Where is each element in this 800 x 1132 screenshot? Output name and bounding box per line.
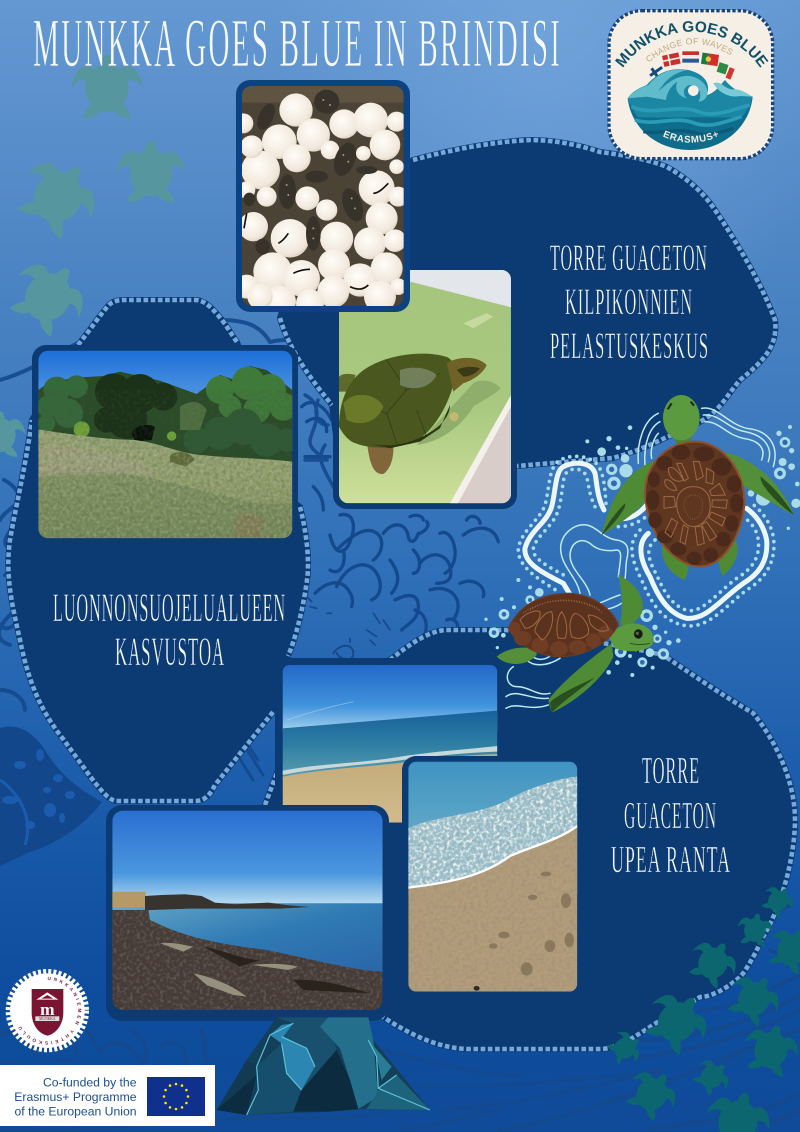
background squiggle pattern: left bbox=[0, 320, 335, 780]
badge title: MUNKKA GOES BLUE bbox=[615, 21, 768, 68]
co-funding text: Co-funded by the bbox=[43, 1076, 137, 1090]
text: beach caption: TORRE bbox=[642, 750, 700, 792]
school name ring: UNKKANIEMEN YHTEISKOULU bbox=[18, 976, 82, 1045]
icon: EU flag bbox=[147, 1077, 205, 1116]
photo: rocky beach with seaweed bbox=[106, 805, 389, 1021]
photo: nature reserve vegetation bbox=[32, 345, 298, 545]
Erasmus+ co-funding box bbox=[0, 1065, 215, 1126]
school monogram: m bbox=[40, 1000, 55, 1019]
school banner text: MUNKKA bbox=[39, 1017, 56, 1021]
co-funding text: Erasmus+ Programme bbox=[14, 1090, 137, 1104]
badge wave bbox=[628, 69, 753, 150]
photo: beach with horizon bbox=[275, 658, 505, 828]
text: beach caption bbox=[611, 750, 731, 881]
co-funding text bbox=[14, 1076, 137, 1118]
panel: bottom right beach panel bbox=[265, 630, 795, 1049]
logo: Munkka Goes Blue badge bbox=[607, 9, 774, 160]
icon: rock cave bbox=[217, 1017, 430, 1115]
dotted aboriginal-style ring behind turtles bbox=[506, 408, 775, 708]
badge subtitle: CHANGE OF WAVES bbox=[646, 38, 733, 62]
panel: top right rescue centre panel bbox=[280, 140, 775, 466]
background squiggle pattern: centre bbox=[302, 403, 498, 660]
text: vegetation caption bbox=[53, 585, 286, 674]
panel: left nature reserve panel bbox=[8, 300, 308, 801]
co-funding text: of the European Union bbox=[15, 1104, 136, 1118]
small brown turtle bbox=[497, 575, 654, 713]
icon: small turtle shell bbox=[508, 593, 618, 657]
badge flags bbox=[647, 51, 735, 80]
turtle silhouettes: lower right bbox=[604, 880, 800, 1132]
icon: big turtle shell bbox=[645, 442, 744, 567]
concentric dot clusters bbox=[484, 425, 800, 677]
text: LUONNONSUOJELUALUEEN bbox=[53, 585, 286, 630]
big brown turtle bbox=[602, 395, 794, 580]
icon: small turtle flippers and head bbox=[497, 575, 654, 713]
icon: big turtle flippers and head bbox=[602, 395, 794, 580]
turtle silhouettes: upper left bbox=[0, 55, 186, 457]
background pattern mass: lower left bbox=[0, 727, 102, 866]
school shield bbox=[32, 989, 63, 1036]
background squiggle pattern: bottom bbox=[0, 905, 800, 1130]
text: rescue centre caption bbox=[550, 238, 709, 367]
logo: school emblem bbox=[6, 969, 89, 1052]
photo: green tub with rescued turtle bbox=[333, 264, 517, 509]
photo: hatchling turtles and eggs bbox=[233, 80, 410, 318]
text: vegetation caption: KASVUSTOA bbox=[115, 629, 225, 674]
photo: shoreline with footprints bbox=[402, 756, 583, 998]
badge Erasmus+ text: ERASMUS+ bbox=[663, 130, 718, 143]
